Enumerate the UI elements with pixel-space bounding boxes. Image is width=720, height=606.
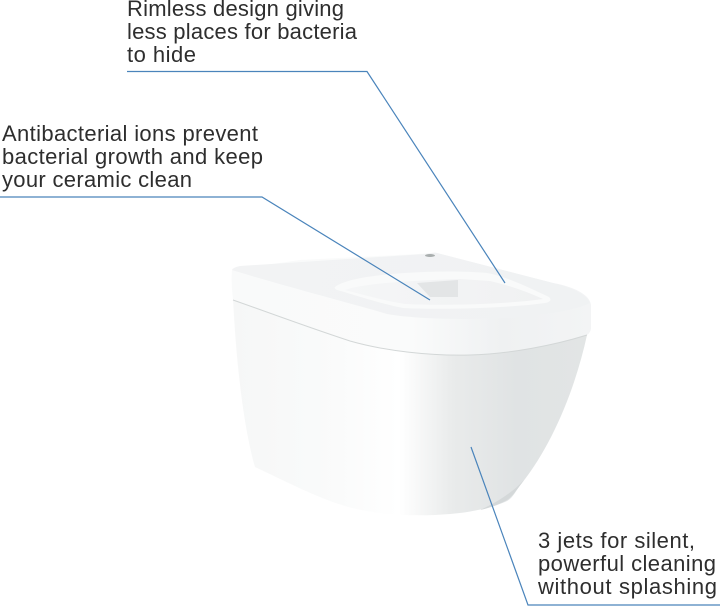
bowl back shadow — [417, 280, 458, 297]
bowl outer lip — [335, 272, 550, 309]
callout: jets: powerful cleaning — [538, 551, 716, 576]
toilet rim — [232, 253, 591, 355]
bowl inner — [345, 279, 543, 305]
toilet seat top surface — [232, 253, 590, 319]
callout: rimless design: less places for bacteria — [127, 19, 358, 44]
callout: antibacterial ions: bacterial growth and keep — [2, 144, 263, 169]
callout: rimless design: to hide — [127, 42, 196, 67]
toilet illustration — [232, 253, 591, 515]
bowl opening — [335, 272, 550, 309]
body bottom shadow — [480, 480, 524, 510]
leader line: jets — [471, 447, 720, 605]
callout: antibacterial ions: your ceramic clean — [2, 167, 192, 192]
callout: jets: without splashing — [537, 574, 717, 599]
callout: antibacterial ions: Antibacterial ions prevent — [2, 121, 258, 146]
toilet body — [233, 298, 587, 515]
tap hole — [425, 254, 435, 257]
leader line: antibacterial — [0, 197, 430, 300]
leader line: rimless — [127, 72, 505, 283]
callout: jets: 3 jets for silent, — [538, 528, 695, 553]
rim edge shadow — [233, 300, 587, 355]
